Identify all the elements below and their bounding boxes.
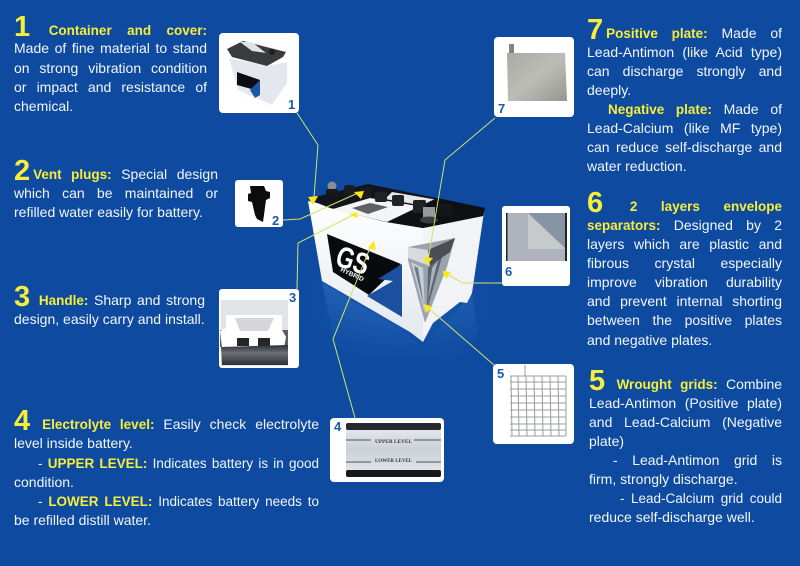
card 2: vent plug bbox=[235, 180, 283, 228]
leader line 1 bbox=[297, 113, 318, 197]
card 1: container and cover bbox=[219, 33, 299, 113]
text: 6 2 layers envelope bbox=[587, 187, 782, 219]
battery lid bbox=[307, 182, 485, 228]
text: 5 Wrought grids: Combine bbox=[589, 365, 782, 397]
card 7: plate bbox=[494, 37, 574, 117]
text: Negative plate: Made of bbox=[608, 101, 782, 117]
text: 2Vent plugs: Special design bbox=[14, 155, 218, 187]
battery label: HYBRID bbox=[339, 266, 365, 283]
leader line 2 bbox=[283, 193, 358, 220]
text: chemical. bbox=[14, 98, 73, 114]
text: or impact and resistance of bbox=[14, 79, 207, 95]
main battery illustration bbox=[307, 182, 485, 385]
text: can reduce self-discharge and bbox=[587, 139, 782, 155]
leader line 3 bbox=[297, 215, 353, 289]
text: 7Positive plate: Made of bbox=[587, 14, 782, 46]
text: 2 vent plugs bbox=[14, 155, 218, 220]
text: and Lead-Calcium (Negative bbox=[589, 414, 782, 430]
text: 3 Handle: Sharp and strong bbox=[14, 281, 205, 313]
card 6: envelope separator bbox=[502, 206, 570, 286]
text: and negative plates. bbox=[587, 332, 712, 348]
text: 1 Container and cover: bbox=[14, 11, 207, 43]
leader line 5 bbox=[426, 306, 494, 365]
text: - LOWER LEVEL: Indicates battery needs to bbox=[38, 494, 319, 509]
text: Lead-Antimon (Positive plate) bbox=[589, 395, 782, 411]
text: reduce self-discharge well. bbox=[589, 509, 755, 525]
battery glow bbox=[270, 220, 530, 380]
text: - UPPER LEVEL: Indicates battery is in good bbox=[38, 456, 319, 471]
text: level inside battery. bbox=[14, 435, 133, 451]
battery right face bbox=[423, 212, 484, 342]
card number 5: 5 bbox=[497, 366, 504, 381]
text: which can be maintained or bbox=[14, 185, 218, 201]
text: can discharge strongly and bbox=[587, 63, 782, 79]
card 4: electrolyte level: LOWER LEVEL bbox=[375, 458, 412, 464]
text: condition. bbox=[14, 474, 74, 490]
text: refilled water easily for battery. bbox=[14, 204, 203, 220]
text: 5 wrought grids bbox=[589, 365, 782, 525]
text: - Lead-Calcium grid could bbox=[620, 491, 782, 506]
text: deeply. bbox=[587, 82, 631, 98]
text: 4 electrolyte level bbox=[14, 405, 319, 528]
text: improve vibration durability bbox=[587, 274, 782, 290]
leader line 4 bbox=[333, 243, 372, 418]
card 4: electrolyte level: UPPER LEVEL bbox=[375, 439, 412, 445]
text: 1 container and cover bbox=[14, 11, 208, 114]
card number 2: 2 bbox=[272, 213, 279, 228]
battery left face bbox=[308, 201, 423, 342]
text: 6 envelope separators bbox=[587, 187, 782, 348]
text: design, easily carry and install. bbox=[14, 311, 205, 327]
battery cutaway bbox=[408, 238, 455, 323]
text: Lead-Calcium (like MF type) bbox=[587, 120, 782, 136]
text: 3 handle bbox=[14, 281, 205, 327]
text: separators: Designed by 2 bbox=[587, 217, 782, 233]
card number 6: 6 bbox=[505, 264, 512, 279]
battery floor reflection bbox=[322, 282, 478, 385]
text: 7 positive and negative plates bbox=[587, 14, 782, 174]
battery label bbox=[327, 234, 402, 317]
leader line 6 bbox=[443, 272, 502, 283]
leader line 7 bbox=[428, 118, 495, 260]
text: fibrous crystal especially bbox=[587, 255, 782, 271]
text: 4 Electrolyte level: Easily check electrolyte bbox=[14, 405, 319, 437]
battery label: GS bbox=[332, 240, 373, 282]
text: water reduction. bbox=[587, 158, 687, 174]
card 3: handle bbox=[219, 289, 299, 368]
text: firm, strongly discharge. bbox=[589, 471, 738, 487]
text: on strong vibration condition bbox=[14, 60, 207, 76]
text: Made of fine material to stand bbox=[14, 40, 207, 56]
arrowheads bbox=[308, 191, 451, 313]
text: be refilled distill water. bbox=[14, 512, 151, 528]
card number 1: 1 bbox=[288, 97, 295, 112]
card 5: wrought grid bbox=[493, 364, 574, 444]
card 4: electrolyte level bbox=[330, 418, 444, 482]
card number 4: 4 bbox=[334, 419, 342, 434]
text: plate) bbox=[589, 433, 624, 449]
text: layers which are plastic and bbox=[587, 236, 782, 252]
card number 7: 7 bbox=[498, 101, 505, 116]
text: Lead-Antimon (like Acid type) bbox=[587, 44, 782, 60]
card number 3: 3 bbox=[289, 290, 296, 305]
text: between the positive plates bbox=[587, 312, 782, 328]
text: and prevent internal shorting bbox=[587, 293, 782, 309]
text: - Lead-Antimon grid is bbox=[613, 452, 782, 468]
